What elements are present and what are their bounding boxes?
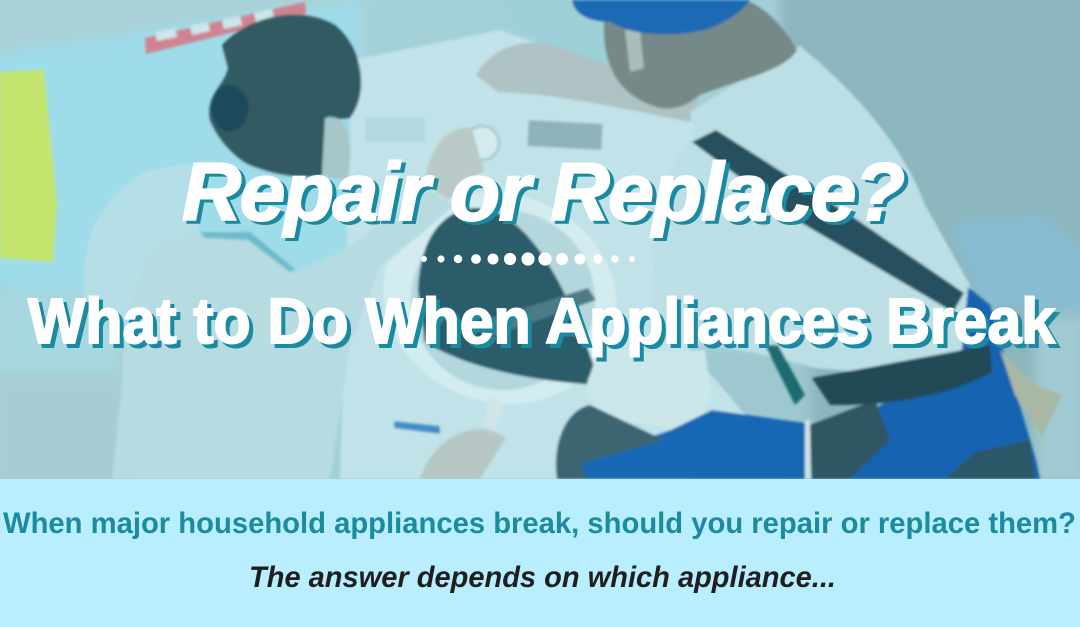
washing machine body <box>340 30 800 479</box>
woman's hand on dial <box>425 128 484 200</box>
washer door ring <box>384 192 616 404</box>
woman's shirt <box>112 188 455 479</box>
man's hair <box>604 0 797 108</box>
washer drum dark interior <box>418 208 600 385</box>
dial <box>465 126 499 160</box>
title: Repair or Replace?: Repair or Replace? <box>182 147 905 238</box>
leather tool pouch <box>1000 350 1062 437</box>
dotted divider <box>421 252 635 266</box>
man's blue cap <box>572 0 750 34</box>
man's shirt <box>690 46 973 373</box>
icon: yellow-green cloth <box>0 70 57 262</box>
intro answer: The answer depends on which appliance... <box>249 561 836 594</box>
woman's neck and ear <box>322 117 350 179</box>
man's black strap <box>692 130 964 312</box>
grey knee patch <box>556 405 664 479</box>
shirt collar <box>200 232 296 272</box>
panel: intro <box>0 479 1080 627</box>
woman's hair <box>209 15 361 177</box>
man's ear <box>625 30 644 72</box>
title: What to Do When Appliances Break: What to Do When Appliances Break <box>28 285 1055 357</box>
man's blue trousers <box>580 410 808 479</box>
hero photo: technician and customer at a washing machine <box>0 0 1080 490</box>
machine control panel <box>527 120 603 150</box>
man's tool belt <box>812 345 992 405</box>
man's arm over machine <box>476 42 700 122</box>
intro question: When major household appliances break, should you repair or replace them? <box>3 507 1076 540</box>
pale washer drum behind woman <box>84 160 215 330</box>
man's forearm and sleeve <box>587 345 712 432</box>
icon: red drying rack <box>145 2 306 54</box>
hand with pen and paper <box>394 395 506 479</box>
machine top band <box>571 0 604 22</box>
screwdriver <box>765 345 805 405</box>
